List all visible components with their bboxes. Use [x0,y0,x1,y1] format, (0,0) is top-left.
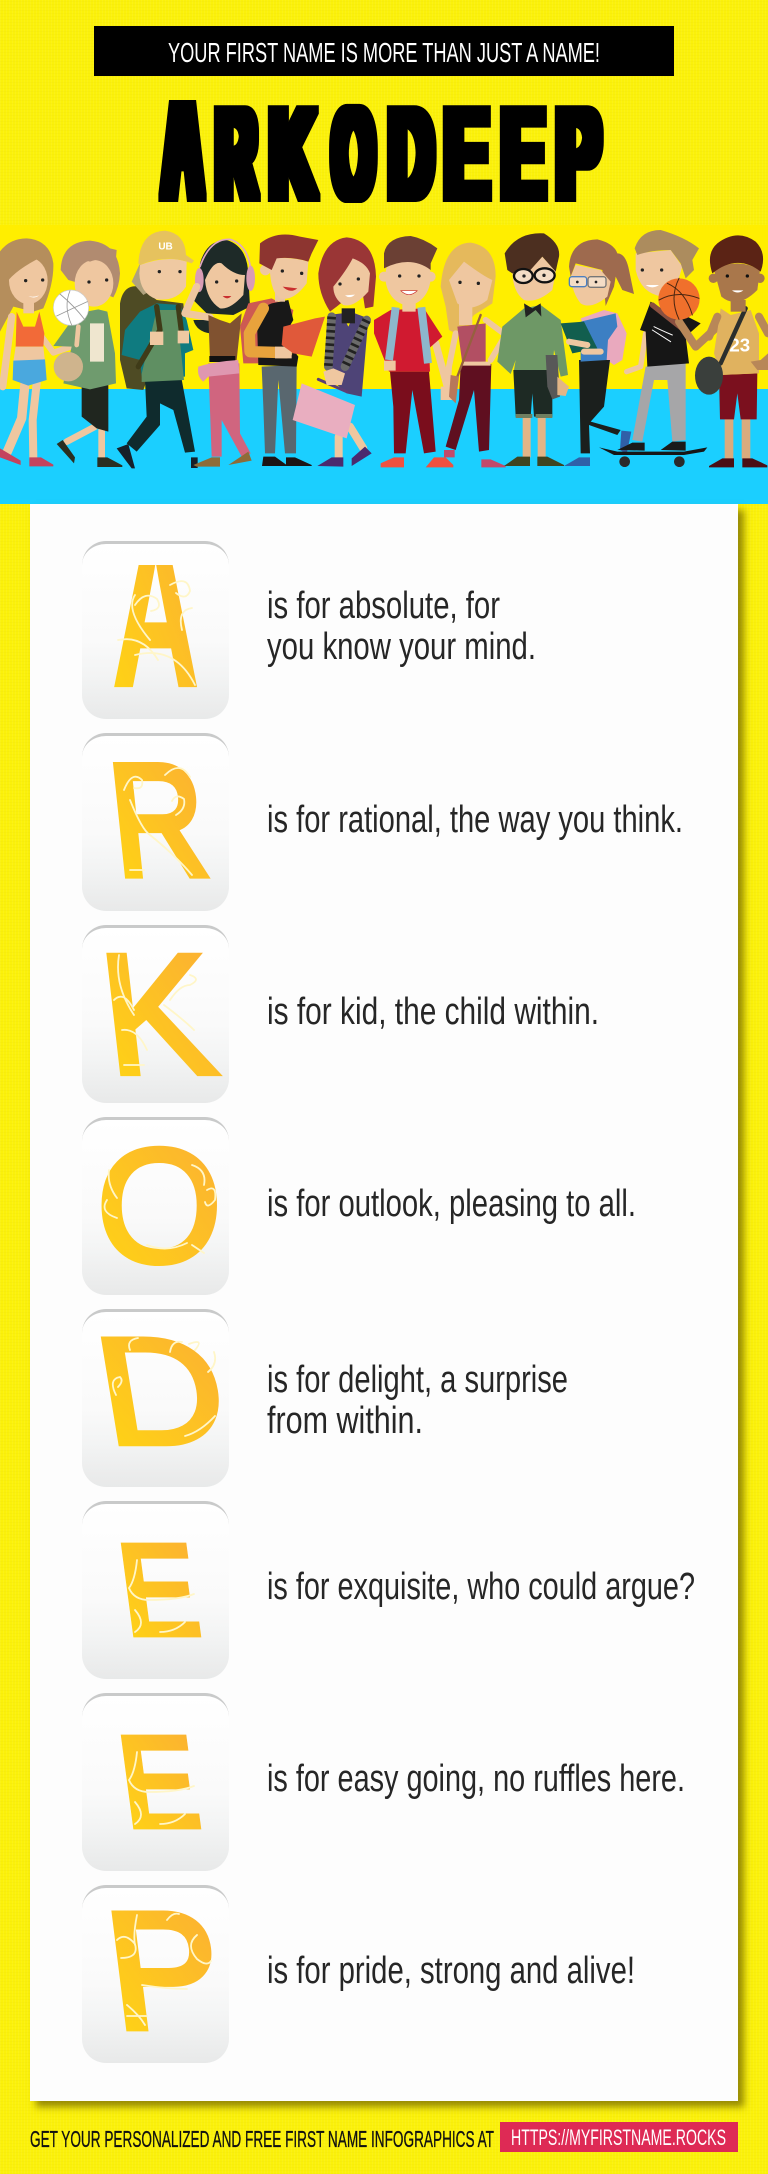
row K: K [91,918,223,1110]
letter tile R [82,733,229,911]
row O [96,1116,636,1297]
student 12: boy in tank top with shoulder bag: 23 [729,335,750,356]
illustration: group of twelve students [0,230,768,468]
row A: you know your mind. [267,626,536,668]
student 3: boy with cap and backpack: UB [158,241,173,252]
student 7: boy in red shirt [374,236,454,467]
row E second: E [109,1706,210,1859]
row O: is for outlook, pleasing to all. [267,1183,636,1225]
row R: R [102,731,214,909]
letter tile P [82,1885,229,2063]
title: name: P [556,81,600,226]
letter tile O [82,1117,229,1295]
row K [91,918,599,1110]
letter tile K [82,925,229,1103]
student 3: boy with cap and backpack [117,231,198,468]
letter tile D [82,1309,229,1487]
row A [114,565,534,688]
row E: E [109,1514,210,1667]
row E [109,1514,695,1667]
row A: A [112,486,199,733]
row D: is for delight, a surprise [267,1359,568,1401]
title: name: R [216,82,256,227]
student 2: girl with volleyball [53,241,122,467]
skateboard [599,447,707,467]
row R [102,731,683,909]
letter tile E second [82,1693,229,1871]
row E second [109,1706,685,1859]
student 5: boy reading book [240,234,325,466]
student 1: girl in orange top [0,238,78,466]
title: name: A [163,41,202,236]
row A: is for absolute, for [267,585,500,627]
banner: tagline [94,26,674,76]
panel: name letters [30,504,738,2101]
letters and meanings [100,565,694,2032]
row P: P [97,1879,231,2064]
row P: is for pride, strong and alive! [267,1950,635,1992]
row P [97,1879,635,2064]
student 8: blonde girl [441,243,506,467]
student 9: boy with glasses and laptop [497,233,569,466]
title: name: D [389,82,433,226]
title: name: E [502,82,545,226]
student 11: skater boy with basketball [617,230,717,451]
title: name: K [270,81,315,226]
row D: D [84,1306,238,1476]
row K: is for kid, the child within. [267,991,599,1033]
letter tile A [82,541,229,719]
student 12: boy in tank top with shoulder bag [695,235,768,467]
row O: O [96,1116,222,1297]
student 6: girl with pink bag [293,237,376,467]
title: name: O [333,82,374,225]
blue floor band [0,389,768,504]
title: name [158,100,604,203]
yellow band behind students [0,225,768,389]
row D [84,1306,568,1476]
student 4: girl with headphones [185,239,255,467]
student 10: girl with ponytail and tablet [561,239,634,466]
letter tile E [82,1501,229,1679]
row D: from within. [267,1400,423,1442]
title: name: E [444,81,489,226]
